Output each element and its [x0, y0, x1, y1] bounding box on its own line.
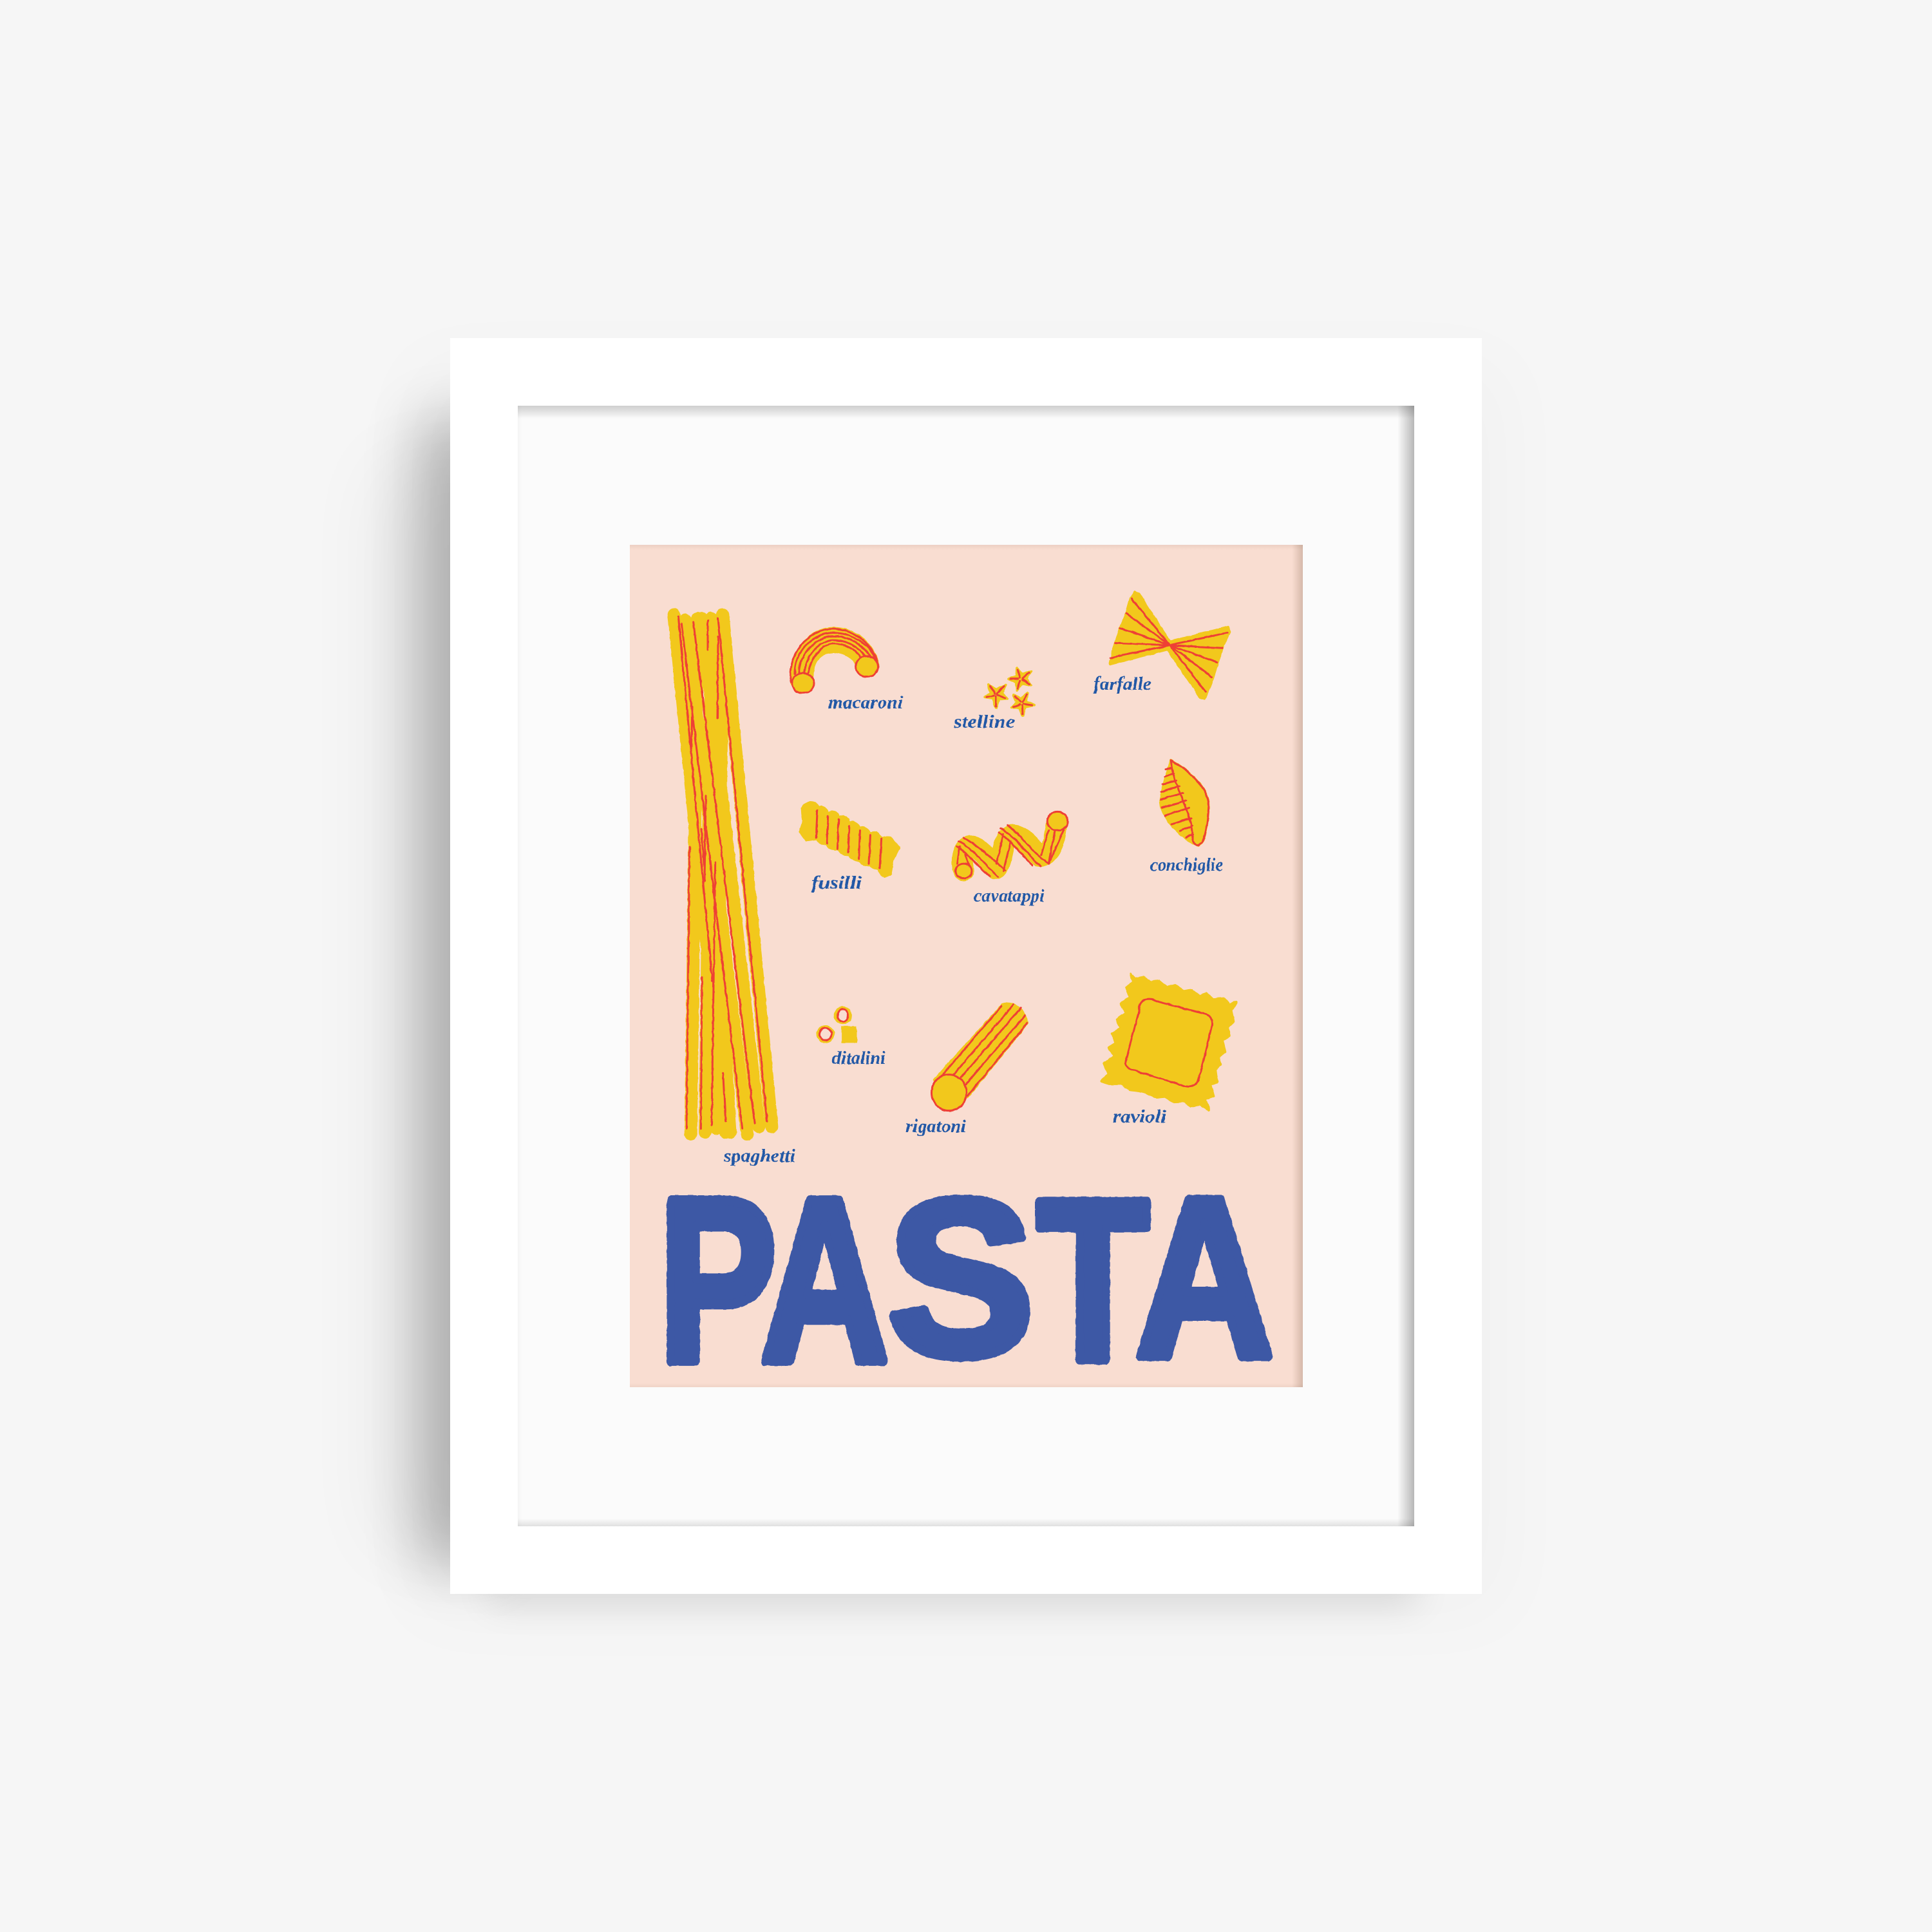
panel: pasta poster — [630, 545, 1303, 1411]
poster background — [630, 545, 1303, 1387]
label: conchiglie: conchiglie — [1150, 855, 1223, 875]
title: PASTA: A — [1135, 1151, 1274, 1405]
ravioli square — [1101, 974, 1236, 1110]
mat board with inner shadows — [518, 406, 1414, 1526]
pasta: ditalini — [817, 1007, 886, 1068]
title: PASTA: A — [761, 1150, 889, 1411]
pasta: ravioli — [1101, 974, 1236, 1127]
frame drop shadow — [380, 361, 1507, 1616]
macaroni shape — [790, 629, 878, 693]
pasta: conchiglie — [1150, 760, 1223, 875]
pasta: spaghetti — [674, 614, 795, 1166]
conchiglie shell — [1160, 760, 1209, 845]
white picture frame — [450, 338, 1482, 1594]
rigatoni tube — [931, 1004, 1028, 1111]
label: spaghetti: spaghetti — [723, 1146, 795, 1166]
label: fusilli: fusilli — [811, 873, 862, 893]
cavatappi corkscrew — [955, 811, 1068, 878]
pasta: fusilli — [800, 803, 898, 893]
label: stelline: stelline — [953, 712, 1015, 732]
pasta: cavatappi — [955, 811, 1068, 906]
label: rigatoni: rigatoni — [905, 1116, 966, 1137]
label: ditalini: ditalini — [832, 1048, 886, 1068]
title: PASTA — [659, 1150, 1274, 1411]
spaghetti strands — [674, 614, 772, 1134]
title: PASTA: S — [887, 1153, 1034, 1402]
label: farfalle: farfalle — [1094, 674, 1151, 694]
pasta: farfalle — [1094, 592, 1229, 699]
title: PASTA: P — [659, 1150, 777, 1411]
stelline stars — [985, 668, 1034, 716]
label: cavatappi: cavatappi — [974, 886, 1045, 906]
pasta: rigatoni — [905, 1004, 1028, 1137]
poster artwork — [659, 592, 1274, 1411]
title: PASTA: T — [1037, 1153, 1149, 1408]
pasta: stelline — [953, 668, 1034, 732]
farfalle bow — [1110, 592, 1229, 699]
pasta: macaroni — [790, 629, 903, 713]
fusilli spiral — [800, 803, 898, 876]
ditalini tubes — [817, 1007, 857, 1043]
label: ravioli: ravioli — [1113, 1106, 1166, 1127]
label: macaroni: macaroni — [828, 692, 903, 713]
